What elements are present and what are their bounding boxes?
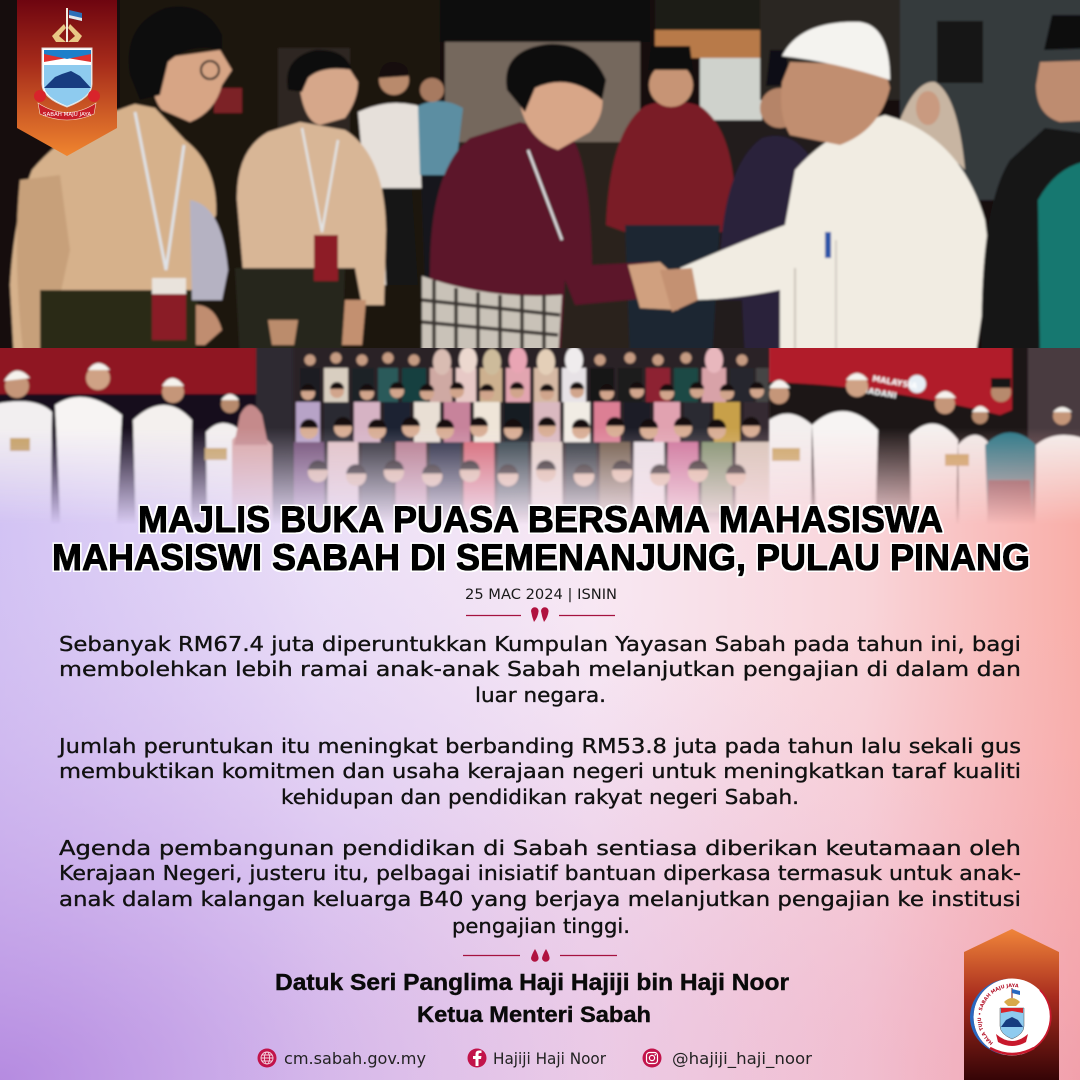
person: man in blue shirt background	[418, 78, 463, 285]
photo: right award presentation: MALAYSIA	[872, 374, 919, 391]
person: centre student in maroon baju	[422, 44, 690, 360]
person: man in dark shirt	[720, 50, 808, 348]
crowd rows	[294, 347, 770, 512]
text block: paragraph 1	[59, 632, 1021, 707]
icon: facebook	[468, 1048, 486, 1068]
heading: event title: MAHASISWI SABAH DI SEMENANJUNG, PULAU PINANG	[52, 537, 1030, 578]
person: chief minister in white baju and cap	[660, 22, 990, 360]
text block: paragraph 2: Jumlah peruntukan itu meningkat berbanding RM53.8 juta pada tahun lalu sekali gus	[57, 734, 1021, 758]
person: man in beige baju with lanyard	[10, 7, 232, 360]
text block: paragraph 3: anak dalam kalangan keluarga B40 yang berjaya melanjutkan pengajian ke institusi	[59, 887, 1021, 911]
person: man in white shirt background	[358, 62, 430, 285]
footer: website: cm.sabah.gov.my	[284, 1049, 426, 1068]
person: second man in beige baju	[235, 50, 386, 360]
text block: paragraph 2: membuktikan komitmen dan usaha kerajaan negeri untuk meningkatkan taraf kualiti	[59, 759, 1021, 783]
date line: 25 MAC 2024 | ISNIN	[465, 587, 617, 603]
top photo: students greeting the chief minister	[0, 0, 1080, 370]
person: woman in beige hijab	[898, 82, 965, 170]
text block: paragraph 1: luar negara.	[475, 683, 606, 707]
icon: crest ornament	[52, 24, 82, 42]
photo: right award presentation: MADANI	[860, 385, 897, 400]
heading: event title	[52, 499, 1030, 578]
person: man with glasses on right edge	[982, 15, 1080, 360]
icon: Sabah flag on pole	[67, 8, 82, 42]
text block: paragraph 1: membolehkan lebih ramai anak-anak Sabah melanjutkan pengajian di dalam dan	[59, 657, 1021, 681]
icon: Hala Tuju Sabah Maju Jaya seal	[970, 978, 1052, 1056]
icon: closing quote divider	[463, 949, 617, 962]
ribbon: Sabah crest banner	[17, 0, 117, 156]
icon: Sabah state shield	[42, 48, 92, 107]
icon: instagram	[642, 1048, 662, 1068]
footer: facebook: Hajiji Haji Noor	[493, 1049, 606, 1068]
photo: group of students	[292, 348, 770, 522]
icon: globe	[258, 1048, 276, 1068]
heading: event title: MAJLIS BUKA PUASA BERSAMA MAHASISWA	[138, 499, 943, 540]
photo: right award presentation	[767, 348, 1080, 521]
footer: instagram: @hajiji_haji_noor	[672, 1049, 812, 1069]
scroll: Sabah Maju Jaya	[34, 90, 100, 120]
photo: left award presentation	[0, 348, 295, 522]
person: man in red baju and songkok	[606, 46, 735, 360]
text block: paragraph 3: pengajian tinggi.	[452, 914, 630, 938]
text block: paragraph 2	[57, 734, 1021, 809]
speaker title: Ketua Menteri Sabah	[417, 1002, 651, 1027]
ribbon: Hala Tuju seal banner	[964, 929, 1059, 1080]
text block: paragraph 2: kehidupan dan pendidikan rakyat negeri Sabah.	[281, 785, 799, 809]
text block: paragraph 3	[59, 836, 1021, 938]
scroll: Sabah Maju Jaya: SABAH MAJU JAYA	[43, 112, 91, 118]
text block: paragraph 3: Kerajaan Negeri, justeru itu, pelbagai inisiatif bantuan diperkasa termasuk untuk anak-	[59, 861, 1021, 885]
speaker name: Datuk Seri Panglima Haji Hajiji bin Haji Noor	[275, 969, 789, 995]
event photo strip fading into background	[0, 348, 1080, 522]
icon: opening quote divider	[466, 607, 615, 622]
text block: paragraph 3: Agenda pembangunan pendidikan di Sabah sentiasa diberikan keutamaan oleh	[59, 836, 1021, 860]
text block: paragraph 1: Sebanyak RM67.4 juta diperuntukkan Kumpulan Yayasan Sabah pada tahun ini, bagi	[59, 632, 1021, 656]
icon: Hala Tuju Sabah Maju Jaya seal: HALA TUJU • SABAH MAJU JAYA	[978, 984, 1018, 1046]
